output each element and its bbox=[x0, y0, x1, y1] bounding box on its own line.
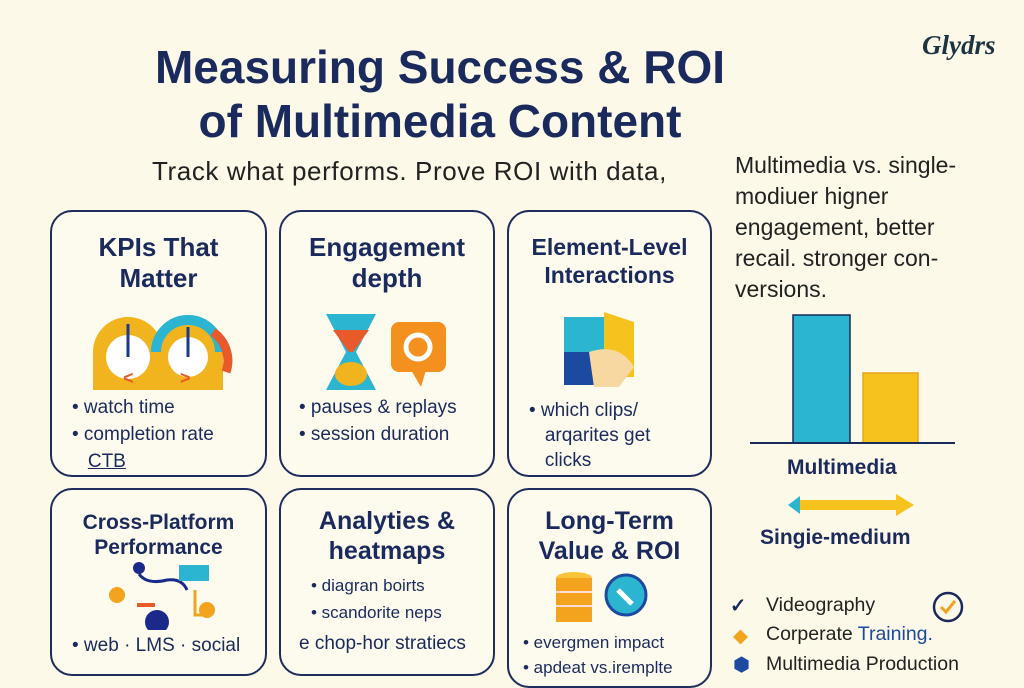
label: Single-medium: Singie-medium bbox=[760, 526, 911, 549]
panel: Long-Term: • evergmen impact bbox=[523, 633, 664, 652]
icon: gauges bbox=[93, 315, 232, 390]
panel: Analytics bbox=[279, 488, 495, 676]
panel: Long-Term: • apdeat vs.iremplte bbox=[523, 658, 673, 677]
bullets: CTB bbox=[88, 451, 126, 472]
icon: gauges: > bbox=[180, 368, 191, 388]
legend: Multimedia Production bbox=[766, 653, 959, 675]
icon: hourglass and chat bbox=[326, 314, 446, 390]
panel: Element-Level: Element-Level bbox=[532, 234, 687, 260]
panel: Long-Term bbox=[507, 488, 712, 688]
panel: KPIs: Matter bbox=[119, 263, 198, 293]
panel: Analytics: • scandorite neps bbox=[311, 603, 442, 622]
panel: Cross-Platform: Performance bbox=[94, 536, 223, 559]
text: comparison: recail. stronger con- bbox=[735, 245, 938, 271]
panel: Engagement: • pauses & replays bbox=[299, 397, 457, 418]
icon: hand puzzle bbox=[564, 312, 634, 387]
panel: Analytics: Analyties & bbox=[319, 507, 455, 535]
panel: Engagement: • session duration bbox=[299, 424, 449, 445]
panel: Element-Level: • which clips/ bbox=[529, 400, 638, 421]
panel: KPIs: KPIs That bbox=[99, 232, 218, 262]
panel: Engagement bbox=[279, 210, 495, 477]
panel: Engagement: Engagement bbox=[309, 232, 465, 262]
title bbox=[155, 41, 725, 147]
panel: Long-Term: Value & ROI bbox=[539, 537, 680, 565]
icon: coins bbox=[556, 572, 648, 622]
label: Multimedia: Multimedia bbox=[787, 456, 897, 479]
panel: Element-Level bbox=[507, 210, 712, 477]
subtitle: Track what performs. Prove ROI with data, bbox=[152, 156, 667, 186]
legend: ⬢ bbox=[733, 654, 750, 676]
panel: Element-Level: arqarites get bbox=[545, 425, 650, 446]
bullets: • completion rate bbox=[72, 424, 214, 445]
text: comparison: Multimedia vs. single- bbox=[735, 152, 956, 178]
bar chart bbox=[750, 314, 955, 444]
panel: Element-Level: clicks bbox=[545, 450, 591, 471]
panel: Analytics: • diagran boirts bbox=[311, 576, 425, 595]
panel: Cross-Platform: Cross-Platform bbox=[83, 511, 234, 534]
text: comparison: versions. bbox=[735, 276, 827, 302]
bullets: • watch time bbox=[72, 397, 175, 418]
icon: network bbox=[109, 562, 215, 630]
icon: gauges: < bbox=[123, 368, 134, 388]
text: comparison bbox=[735, 152, 956, 302]
panel: Analytics: e chop-hor stratiecs bbox=[299, 633, 466, 654]
legend: ◆ bbox=[733, 625, 748, 647]
panel: Cross-Platform: • web · LMS · social bbox=[72, 635, 240, 656]
panel: Long-Term: Long-Term bbox=[545, 507, 674, 535]
text: comparison: modiuer higner bbox=[735, 183, 888, 209]
panel: Engagement: depth bbox=[352, 263, 422, 293]
panel: Cross-Platform bbox=[50, 488, 267, 676]
panel: Element-Level: Interactions bbox=[544, 262, 675, 288]
panel: KPIs bbox=[50, 210, 267, 477]
title: of Multimedia Content bbox=[199, 95, 681, 147]
bullets bbox=[72, 397, 214, 472]
arrow bbox=[788, 494, 914, 516]
legend bbox=[730, 592, 964, 676]
legend: ✓ bbox=[730, 595, 746, 617]
title: Measuring Success & ROI bbox=[155, 41, 725, 93]
text: comparison: engagement, better bbox=[735, 214, 934, 240]
legend: Videography bbox=[766, 594, 875, 616]
panel: Analytics: heatmaps bbox=[329, 537, 445, 565]
legend: Corperate Training. bbox=[766, 623, 933, 645]
logo: Glydrs bbox=[922, 30, 996, 60]
